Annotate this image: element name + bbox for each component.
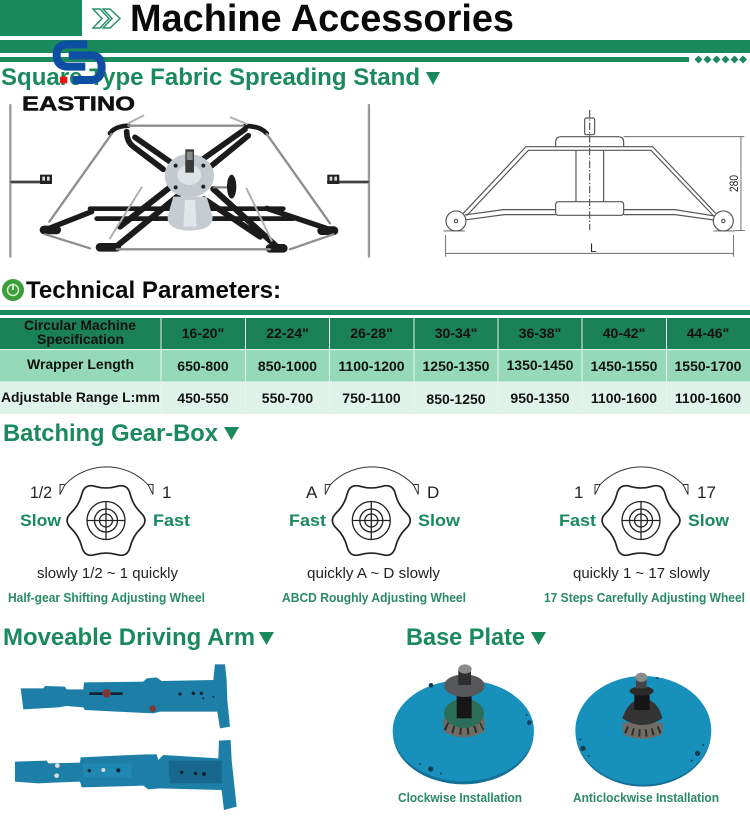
dimension labels: 280 (727, 175, 741, 192)
table row: wrapper length: 1550-1700 (675, 358, 742, 374)
table header row: 16-20" (182, 325, 224, 341)
table header row: 30-34" (435, 325, 477, 341)
gear wheel: ABCD: quickly A ~ D slowly (307, 565, 440, 582)
icon: double chevron (93, 9, 120, 28)
gear wheel: ABCD: Slow (418, 511, 461, 530)
table header row: Specification (37, 331, 124, 347)
table: technical parameters (0, 317, 750, 414)
table row: adjustable range: 750-1100 (342, 390, 401, 406)
table row: wrapper length: Wrapper Length (27, 356, 134, 372)
table row: wrapper length: 1100-1200 (338, 358, 405, 374)
caption: anticlockwise installation: Anticlockwise Installation (573, 791, 719, 805)
table row: wrapper length: 850-1000 (258, 358, 317, 374)
caption: clockwise installation: Clockwise Installation (398, 791, 522, 805)
gear wheel: 17 steps: Slow (688, 511, 730, 530)
gear wheel: half-gear: Fast (153, 511, 190, 530)
gear wheel: half-gear: 1 (162, 483, 171, 502)
gear wheel: 17 steps: quickly 1 ~ 17 slowly (573, 565, 710, 582)
gear wheel: half-gear: slowly 1/2 ~ 1 quickly (37, 565, 178, 582)
table row: wrapper length: 1450-1550 (591, 358, 658, 374)
table row: adjustable range: 1100-1600 (675, 390, 741, 406)
photo: anticlockwise base plate (575, 673, 711, 787)
heading: moveable driving arm: Moveable Driving Arm (3, 624, 255, 651)
heading: fabric spreading stand: Square Type Fabric Spreading Stand (1, 64, 420, 91)
heading: base plate: Base Plate (406, 624, 525, 651)
black scissor arms (44, 126, 334, 248)
diagram: stand dimensions (443, 110, 745, 257)
icon: power button (2, 279, 24, 301)
gear wheel: ABCD: Fast (289, 511, 326, 530)
table row: wrapper length (27, 356, 742, 374)
dimension labels (590, 175, 741, 255)
gear wheel: half-gear: Slow (20, 511, 62, 530)
hub (165, 149, 236, 231)
table header row (24, 317, 729, 347)
gear wheel: half-gear (8, 467, 205, 605)
header rule bars (0, 40, 750, 64)
table row: adjustable range: 450-550 (177, 390, 229, 406)
table row: adjustable range: 950-1350 (510, 390, 570, 406)
logo: Eastino: EASTINO (22, 94, 135, 116)
table row: adjustable range: Adjustable Range L:mm (1, 389, 160, 405)
dimension labels: L (590, 241, 597, 255)
table row: wrapper length: 1350-1450 (507, 357, 574, 373)
table row: adjustable range (1, 389, 741, 407)
gear wheel: 17 steps: 17 Steps Carefully Adjusting Wheel (544, 591, 745, 605)
table row: wrapper length: 1250-1350 (423, 358, 490, 374)
photo: fabric spreading stand (10, 105, 369, 257)
table header row: Circular Machine (24, 317, 136, 333)
table row: adjustable range: 550-700 (262, 390, 313, 406)
gear wheel: 17 steps (544, 467, 745, 605)
table header row: 36-38" (519, 325, 561, 341)
table header row: 40-42" (603, 325, 645, 341)
gear wheel: half-gear: Half-gear Shifting Adjusting Wheel (8, 591, 205, 605)
table row: wrapper length: 650-800 (177, 358, 229, 374)
table row: adjustable range: 850-1250 (426, 391, 486, 407)
table header row: 22-24" (266, 325, 309, 341)
photo: driving arm bottom (15, 740, 237, 810)
heading: technical parameters: Technical Parameters: (26, 277, 281, 304)
photo: clockwise base plate (393, 664, 534, 784)
header green block (0, 0, 82, 36)
gear wheel: 17 steps: Fast (559, 511, 596, 530)
gear wheel: ABCD: D (427, 483, 439, 502)
heading: batching gear-box: Batching Gear-Box (3, 420, 219, 447)
table header row: 26-28" (350, 325, 393, 341)
side rods (10, 105, 369, 257)
gear wheel: ABCD: ABCD Roughly Adjusting Wheel (282, 591, 466, 605)
gear wheel: ABCD (282, 467, 466, 605)
table header row: 44-46" (687, 325, 729, 341)
table row: adjustable range: 1100-1600 (591, 390, 657, 406)
gear wheel: ABCD: A (306, 483, 318, 502)
logo: Eastino (22, 44, 135, 115)
photo: driving arm top (21, 664, 230, 728)
gear wheel: half-gear: 1/2 (30, 483, 52, 502)
steel frame rods (45, 116, 333, 249)
gear wheel: 17 steps: 1 (574, 483, 583, 502)
gear wheel: 17 steps: 17 (697, 483, 716, 502)
